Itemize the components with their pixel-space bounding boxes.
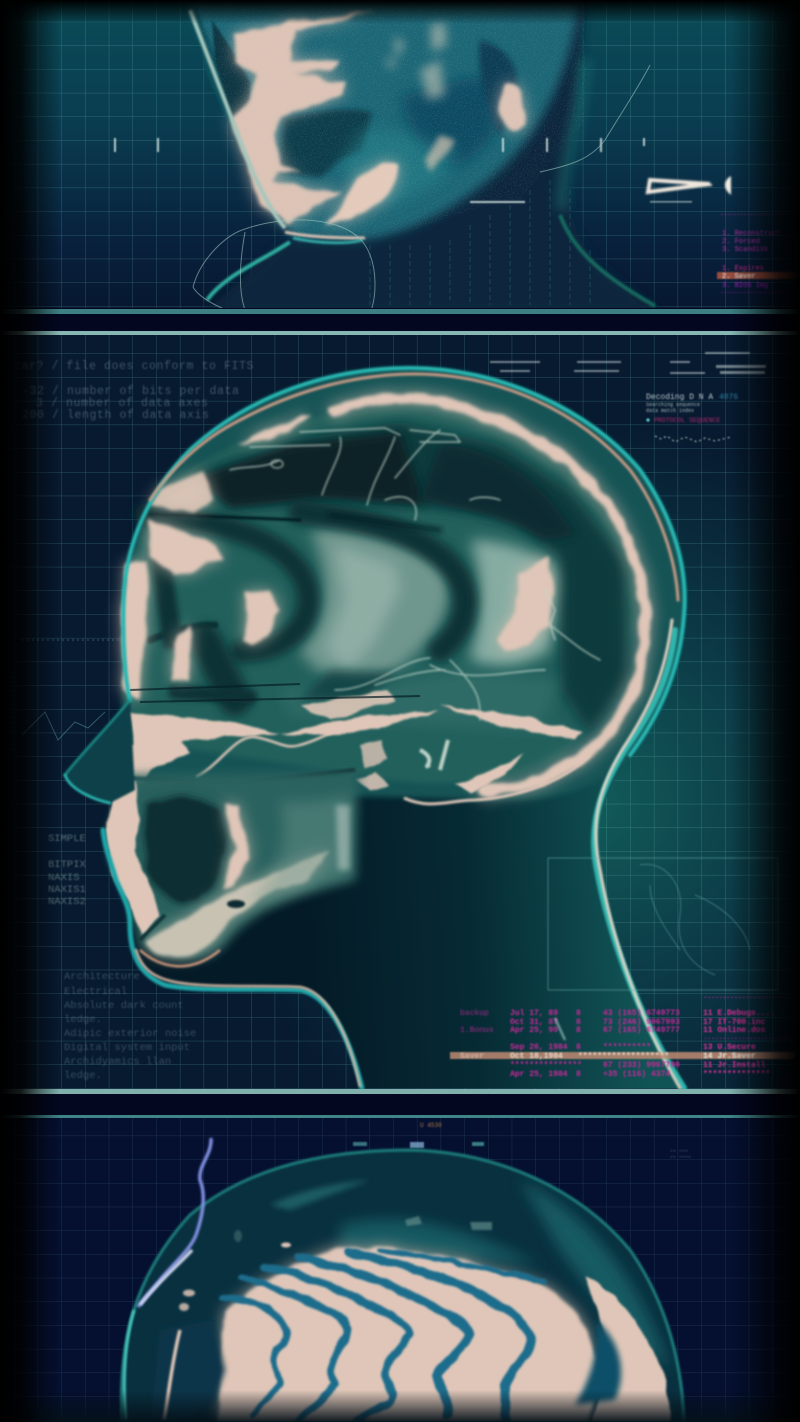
left mono list: simple: BITPIX — [48, 859, 87, 871]
pink data table: 67 (165) 6749777 — [603, 1026, 680, 1035]
DNA decode readout: Searching sequence — [646, 402, 700, 408]
top panel scribble line — [193, 65, 650, 320]
panel: top face scan — [0, 0, 800, 320]
panel: bottom head scan — [0, 1118, 800, 1422]
DNA decode readout: data match index — [646, 408, 694, 414]
pink data table: 43 (165) 6749773 — [603, 1009, 680, 1018]
pink data table: 73 (246) 9067993 — [603, 1018, 680, 1027]
left mono list: body text: Adipic exterior noise — [64, 1028, 196, 1040]
brain — [122, 399, 645, 804]
pink data table: 13 U.Secure — [703, 1043, 756, 1052]
pink data table: 8 — [576, 1009, 581, 1018]
DNA decode readout — [646, 393, 738, 442]
header text left: car? / file does conform to FITS — [14, 360, 254, 373]
brain dark folds — [146, 512, 465, 700]
pink data table: 17 IT-700.inc — [703, 1018, 766, 1027]
left mono list: body text: ledge. — [64, 1070, 102, 1082]
pink data table: Sep 26, 1984 — [510, 1043, 568, 1052]
bottom top readouts — [353, 1122, 691, 1160]
left mono list: body text: Electrical — [64, 986, 127, 998]
sketch box — [548, 858, 778, 990]
neck streak — [555, 1018, 565, 1040]
header text left: -32 / number of bits per data — [22, 385, 240, 398]
top panel pink readout: 2. Saver — [722, 273, 756, 281]
left mono list: body text: Absolute dark count — [64, 1000, 184, 1012]
top panel pink readout — [716, 213, 794, 294]
left mono list: simple — [48, 833, 87, 908]
left mono list: body text: Archidyamics llan — [64, 1056, 171, 1068]
top panel pink readout: ....................... — [720, 288, 794, 296]
DNA decode readout: PROTOCOL SEQUENCE — [654, 417, 720, 424]
bottom top readouts: -- --- — [670, 1148, 688, 1154]
pink data table: Oct 18,1984 — [510, 1052, 563, 1061]
left mono list: simple: SIMPLE — [48, 833, 86, 845]
bottom dome — [121, 1150, 684, 1422]
pink data table: Apr 25, 90 — [510, 1026, 558, 1035]
pink data table: backup — [460, 1009, 489, 1018]
bottom top readouts: -- ---- — [670, 1154, 691, 1160]
header text left: 3 / number of data axes — [36, 397, 209, 410]
DNA decode readout: 4076 — [719, 393, 738, 402]
brain mid-tone patches — [300, 527, 449, 683]
lower streak band — [125, 690, 583, 800]
brain cream highlights — [122, 415, 552, 700]
head outline — [65, 368, 685, 1088]
pink data table: ........................ — [703, 1033, 794, 1042]
header text left: 200 / length of data axis — [22, 409, 210, 422]
pink data table: 11 Online.dos — [703, 1026, 766, 1035]
pink data table: 14 Jr.Saver — [703, 1052, 756, 1061]
bottom top readouts: U 4530 — [420, 1122, 442, 1129]
blue lightning crack — [138, 1138, 211, 1307]
pink data table: 67 (233) 9967790 — [603, 1061, 680, 1070]
top panel tick marks — [114, 138, 692, 203]
skull interior teal — [119, 366, 598, 802]
brain base — [125, 402, 636, 783]
zigzag chart — [22, 640, 124, 741]
top panel pink readout: 3. BIOS Img — [722, 282, 768, 290]
pink data table: ************** — [703, 1070, 770, 1079]
head silhouette fill — [104, 756, 680, 1088]
header data strips right — [490, 352, 766, 374]
brain dark upper region — [195, 422, 628, 735]
left mono list: body text: Digital system input — [64, 1042, 190, 1054]
divider bars: top — [0, 309, 800, 336]
pink data table: ******************* — [578, 1052, 669, 1061]
left mono list: simple: NAXIS1 — [48, 884, 86, 896]
pink data table: 8 — [576, 1018, 581, 1027]
divider bars: lower — [0, 1089, 800, 1119]
top panel face — [188, 0, 580, 243]
left mono list: body text: Architecture — [64, 971, 140, 983]
pink data table: 11 Jr.Install — [703, 1061, 766, 1070]
top panel grain — [194, 8, 585, 240]
pink data table: 8 — [576, 1043, 581, 1052]
DNA decode readout: Decoding D N A — [646, 393, 713, 402]
left mono list: simple: NAXIS2 — [48, 896, 86, 908]
pink data table — [450, 992, 800, 1079]
lower face — [65, 700, 358, 966]
skull ring cream — [333, 399, 645, 790]
pink data table: Oct 31, 87 — [510, 1018, 558, 1027]
panel: middle head scan — [0, 335, 800, 1089]
pink data table: 8 — [576, 1026, 581, 1035]
icon: targeting arrow — [648, 176, 731, 195]
top panel pink readout: 3. Scandisk — [722, 246, 768, 254]
top panel pink readout: 2. Forced — [722, 238, 760, 246]
pink data table: ********** — [603, 1043, 651, 1052]
pink data table: *************** — [510, 1061, 582, 1070]
left mono list: simple: NAXIS — [48, 872, 80, 884]
brain vessels — [230, 428, 600, 720]
top panel neck and shoulders — [205, 0, 660, 312]
top panel pink readout: 1. Reconstruct — [722, 230, 781, 238]
pink data table: Jul 17, 89 — [510, 1009, 558, 1018]
left mono list: body text — [64, 971, 196, 1082]
pink data table: 1.Bonus — [460, 1026, 494, 1035]
bright specks — [179, 1230, 291, 1311]
pink data table: +35 (116) 4374 — [603, 1070, 670, 1079]
pink data table: Apr 25, 1984 — [510, 1070, 568, 1079]
pink data table: 8 — [576, 1070, 581, 1079]
header text left — [14, 360, 254, 422]
left mono list: body text: ledge. — [64, 1014, 102, 1026]
pink data table: 11 E.Debugs.... — [703, 1009, 775, 1018]
pink data table: Saver — [460, 1052, 484, 1061]
top panel pink readout: 1. Expires — [722, 265, 764, 273]
